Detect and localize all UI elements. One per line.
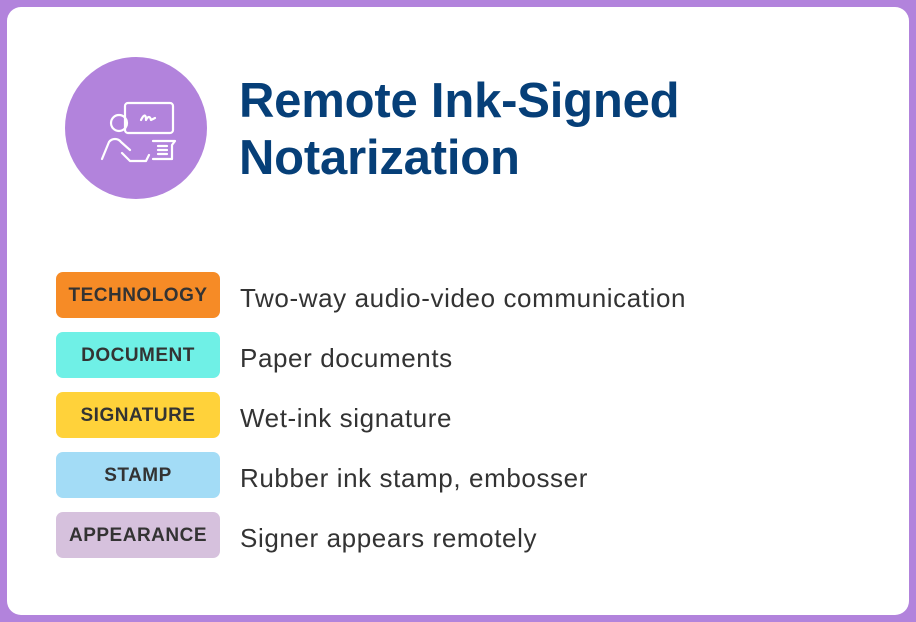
icon: remote signing [65, 57, 207, 199]
row: stamp [56, 452, 588, 498]
row: stamp: STAMP [104, 465, 172, 486]
title [239, 74, 679, 185]
row: appearance: APPEARANCE [69, 525, 207, 546]
title: Notarization [239, 131, 520, 185]
row: stamp: Rubber ink stamp, embosser [240, 463, 588, 493]
row: document: DOCUMENT [81, 345, 195, 366]
row: appearance: Signer appears remotely [240, 523, 537, 553]
row: technology: TECHNOLOGY [68, 285, 208, 306]
row: technology: Two-way audio-video communication [240, 283, 686, 313]
row: signature [56, 392, 452, 438]
row: signature: Wet-ink signature [240, 403, 452, 433]
row: technology [56, 272, 686, 318]
row: signature: SIGNATURE [80, 405, 195, 426]
row: document [56, 332, 453, 378]
title: Remote Ink-Signed [239, 74, 679, 128]
row: document: Paper documents [240, 343, 453, 373]
row: appearance [56, 512, 537, 558]
